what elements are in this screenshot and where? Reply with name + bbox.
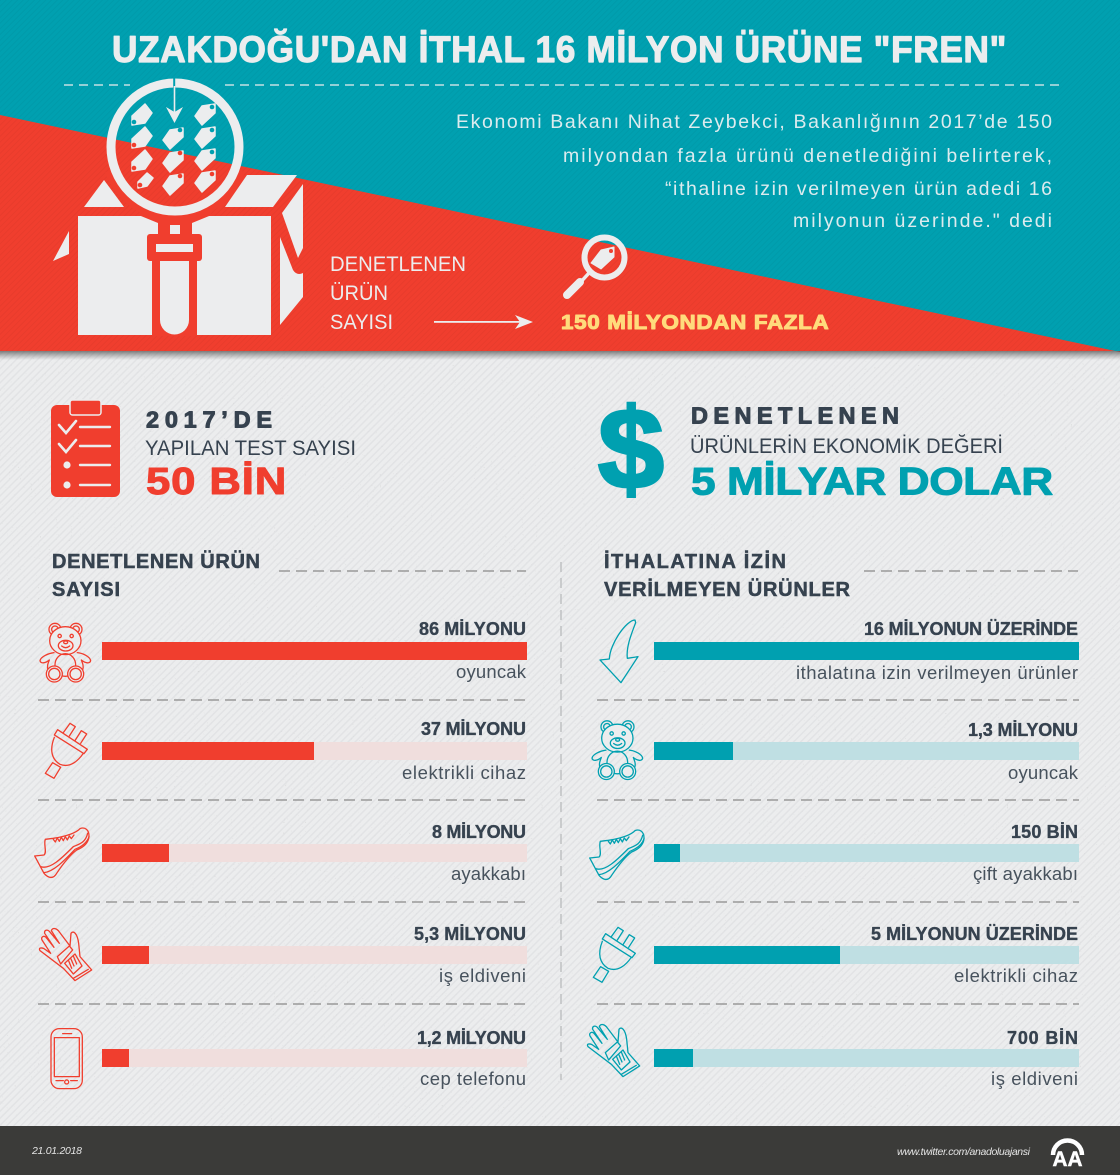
row: toys (592, 720, 1079, 783)
row: shoes (35, 822, 527, 884)
intro paragraph: milyonun üzerinde." dedi (793, 210, 1052, 232)
heading: inspected products: DENETLENEN ÜRÜN (52, 550, 260, 573)
date: 21.01.2018 (31, 1145, 82, 1157)
row: toys: 86 MİLYONU (419, 619, 526, 639)
intro paragraph: milyondan fazla ürünü denetlediğini belirterek, (563, 145, 1052, 167)
row: banned total: ithalatına izin verilmeyen ürünler (796, 662, 1078, 683)
footer bar (0, 1126, 1120, 1175)
row: work gloves (587, 1024, 1079, 1089)
panel: tests in 2017: 50 BİN (146, 460, 286, 502)
icon: small magnifying glass (567, 238, 624, 295)
heading: banned imports: İTHALATINA İZİN (604, 550, 786, 573)
label: inspected products: DENETLENEN (330, 253, 466, 276)
row: work gloves: 700 BİN (1007, 1028, 1078, 1048)
row: electric devices: 5 MİLYONUN ÜZERİNDE (871, 924, 1078, 944)
value: 150 million: 150 MİLYONDAN FAZLA (561, 311, 829, 334)
arrow to inspected total (434, 315, 533, 329)
row: shoes: ayakkabı (451, 863, 526, 884)
heading: inspected products: SAYISI (52, 579, 120, 601)
row: toys: oyuncak (1008, 762, 1079, 783)
source url: www.twitter.com/anadoluajansi (897, 1146, 1031, 1158)
row: electric devices (45, 719, 527, 783)
row: toys (40, 619, 527, 682)
row: shoes: 8 MİLYONU (432, 822, 526, 842)
intro paragraph: Ekonomi Bakanı Nihat Zeybekci, Bakanlığının 2017’de 150 (456, 111, 1052, 133)
row: electric devices: 37 MİLYONU (421, 719, 526, 739)
panel: economic value: ÜRÜNLERİN EKONOMİK DEĞERİ (690, 435, 1003, 458)
row: work gloves: iş eldiveni (439, 965, 526, 986)
panel: economic value (598, 385, 1053, 513)
row: mobile phones (51, 1028, 527, 1089)
icon: clipboard (51, 400, 120, 497)
heading: banned imports: VERİLMEYEN ÜRÜNLER (604, 578, 851, 601)
heading: banned imports (604, 550, 851, 601)
panel: tests in 2017: YAPILAN TEST SAYISI (145, 437, 356, 460)
logo: AA: AA (1052, 1148, 1082, 1171)
label: inspected products: SAYISI (330, 311, 393, 334)
panel: economic value: 5 MİLYAR DOLAR (691, 459, 1053, 503)
row: shoes (590, 822, 1079, 884)
row: toys: 1,3 MİLYONU (968, 720, 1078, 740)
label: inspected products: ÜRÜN (330, 282, 388, 305)
panel: banned imports chart (587, 550, 1079, 1089)
icon: box under magnifying glass (53, 171, 303, 336)
panel: tests in 2017 (51, 400, 356, 502)
row: work gloves: iş eldiveni (991, 1068, 1078, 1089)
stat text: 2017 tests: 2017’DE (146, 406, 272, 432)
row: toys: oyuncak (456, 661, 527, 682)
panel: inspected product chart (35, 550, 527, 1089)
row: mobile phones: cep telefonu (420, 1068, 526, 1089)
row: shoes: çift ayakkabı (973, 863, 1078, 884)
row: work gloves: 5,3 MİLYONU (414, 924, 526, 944)
heading: inspected products (52, 550, 260, 601)
row: shoes: 150 BİN (1011, 822, 1078, 842)
icon: magnifying glass with tags (111, 76, 239, 211)
intro paragraph: “ithaline izin verilmeyen ürün adedi 16 (665, 178, 1052, 200)
row: banned total (600, 619, 1079, 683)
label: inspected products (330, 253, 466, 334)
row: banned total: 16 MİLYONUN ÜZERİNDE (864, 619, 1078, 639)
panel: header banner (0, 0, 1120, 360)
icon: dollar sign: $ (598, 385, 664, 513)
row: electric devices: elektrikli cihaz (954, 965, 1078, 986)
row: work gloves (39, 924, 527, 986)
intro paragraph (456, 111, 1052, 232)
row: mobile phones: 1,2 MİLYONU (417, 1028, 526, 1048)
title: UZAKDOĞU'DAN İTHAL 16 MİLYON ÜRÜNE "FREN" (112, 28, 1006, 70)
stat text: economic value: DENETLENEN (691, 402, 899, 428)
row: electric devices (593, 924, 1079, 986)
row: electric devices: elektrikli cihaz (402, 762, 526, 783)
